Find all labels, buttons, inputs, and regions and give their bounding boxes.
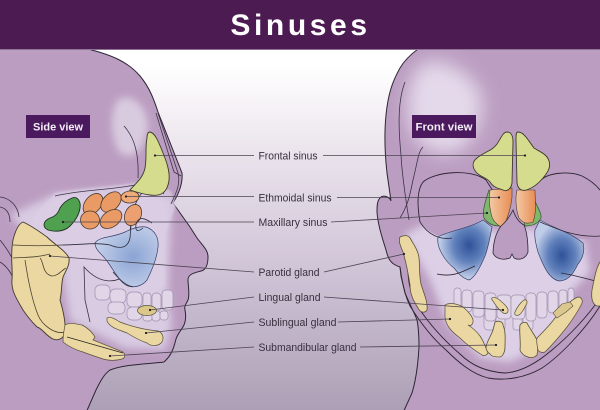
header band (0, 0, 600, 50)
ear shape (0, 197, 19, 280)
zygomatic bone light area (30, 183, 176, 295)
label: submandibular gland: Submandibular gland (258, 342, 356, 354)
ethmoidal sinus front orange (489, 188, 512, 228)
forehead highlight (408, 61, 482, 153)
maxillary sinus blue (95, 227, 158, 287)
side view tag (26, 115, 90, 138)
lingual gland left (492, 298, 508, 313)
teeth front (454, 288, 574, 330)
front view tag: Front view (416, 122, 473, 134)
sublingual gland right (537, 297, 582, 352)
maxillary sinus right blue (535, 220, 584, 281)
front view tag (412, 115, 476, 138)
label: maxillary sinus: Maxillary sinus (258, 217, 328, 229)
pointer dots (49, 154, 526, 357)
parotid gland left (399, 236, 427, 312)
skull highlight (10, 98, 172, 350)
nose cavity (493, 210, 528, 259)
label: frontal sinus: Frontal sinus (258, 150, 318, 162)
labels (258, 150, 356, 354)
parotid gland right (592, 262, 600, 306)
sublingual gland (107, 317, 163, 346)
maxillary sinus green (44, 198, 80, 231)
skull silhouette (377, 49, 600, 410)
ethmoidal sinus front green (483, 190, 541, 226)
jaw lines (400, 267, 600, 379)
title: Sinuses (230, 9, 371, 42)
submandibular gland center left (486, 321, 505, 357)
bone contour lines (30, 113, 181, 330)
frontal sinus (130, 132, 169, 195)
frontal sinus front (473, 132, 513, 191)
maxillary sinus left blue (438, 220, 492, 280)
label: sublingual gland: Sublingual gland (258, 317, 336, 329)
eye socket right (532, 173, 600, 240)
label: parotid gland: Parotid gland (258, 267, 320, 279)
side view head (0, 49, 208, 410)
head silhouette (0, 49, 208, 410)
ethmoidal sinus cells (79, 188, 145, 232)
label: lingual gland: Lingual gland (258, 292, 320, 304)
submandibular gland (63, 323, 125, 360)
lingual gland far right (553, 302, 573, 318)
front view skull (377, 49, 600, 410)
leader lines (50, 156, 525, 356)
eye socket left (418, 172, 494, 238)
lingual gland (138, 306, 156, 316)
lingual gland right (515, 300, 527, 315)
teeth side (95, 285, 173, 321)
submandibular gland center right (520, 322, 538, 358)
temple lines (399, 82, 423, 220)
sublingual and submandibular glands left (445, 304, 488, 356)
parotid gland (12, 222, 69, 340)
lower face highlight (404, 215, 590, 362)
label: ethmoidal sinus: Ethmoidal sinus (258, 192, 332, 204)
side view tag: Side view (33, 122, 83, 134)
